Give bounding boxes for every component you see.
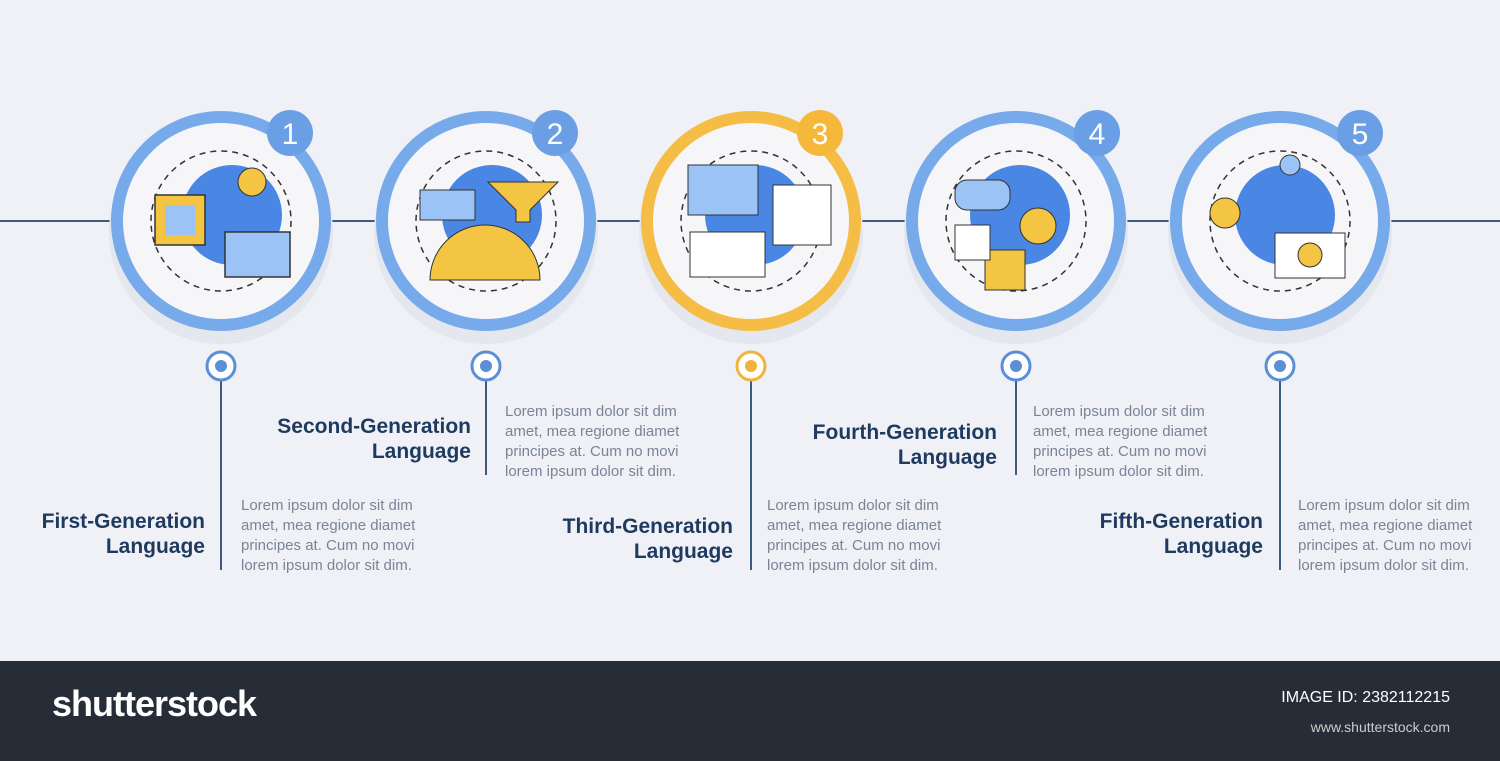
title 5: Language xyxy=(1164,535,1263,558)
title 1: Language xyxy=(106,535,205,558)
url: www.shutterstock.com xyxy=(1311,719,1450,735)
step 3 circle xyxy=(639,110,863,570)
title 1 xyxy=(42,510,205,558)
title 3 xyxy=(562,515,733,563)
body 5: Lorem ipsum dolor sit dim amet, mea regione diamet principes at. Cum no movi lorem ipsum dolor sit dim. xyxy=(1298,497,1472,574)
step 5 circle: 5 xyxy=(1352,118,1368,151)
step 1 circle: 1 xyxy=(282,118,298,151)
title 2 xyxy=(277,415,471,463)
title 5 xyxy=(1100,510,1263,558)
title 3: Language xyxy=(634,540,733,563)
step 2 circle xyxy=(374,110,598,475)
title 4: Language xyxy=(898,446,997,469)
title 2: Second-Generation xyxy=(277,415,471,438)
body 1: Lorem ipsum dolor sit dim amet, mea regione diamet principes at. Cum no movi lorem ipsum dolor sit dim. xyxy=(241,497,415,574)
logo: shutterstock xyxy=(52,683,256,724)
step 4 circle: 4 xyxy=(1089,118,1105,151)
body 3: Lorem ipsum dolor sit dim amet, mea regione diamet principes at. Cum no movi lorem ipsum dolor sit dim. xyxy=(767,497,941,574)
title 5: Fifth-Generation xyxy=(1100,510,1263,533)
title 2: Language xyxy=(372,440,471,463)
footer xyxy=(0,661,1500,761)
title 1: First-Generation xyxy=(42,510,205,533)
step 4 circle xyxy=(904,110,1128,475)
image id: IMAGE ID: 2382112215 xyxy=(1281,689,1450,706)
title 4 xyxy=(813,421,997,469)
step 5 circle xyxy=(1168,110,1392,570)
body 4: Lorem ipsum dolor sit dim amet, mea regione diamet principes at. Cum no movi lorem ipsum dolor sit dim. xyxy=(1033,403,1207,480)
step 1 circle xyxy=(109,110,333,570)
title 4: Fourth-Generation xyxy=(813,421,997,444)
title 3: Third-Generation xyxy=(563,515,733,538)
step 3 circle: 3 xyxy=(812,118,828,151)
body 2: Lorem ipsum dolor sit dim amet, mea regione diamet principes at. Cum no movi lorem ipsum dolor sit dim. xyxy=(505,403,679,480)
step 2 circle: 2 xyxy=(547,118,563,151)
